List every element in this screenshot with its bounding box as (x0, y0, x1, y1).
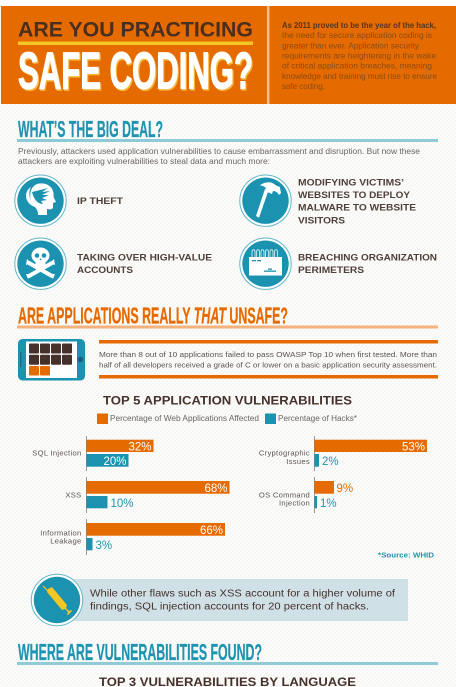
OS command injection (259, 481, 353, 510)
OS command injection: 9% (336, 483, 353, 495)
header intro text: safe coding. (282, 82, 325, 91)
label: modifying websites: VISITORS (298, 215, 346, 226)
information leakage: Information (40, 528, 82, 537)
label: taking over accounts: TAKING OVER HIGH-VALUE (77, 253, 213, 264)
callout: OWASP statistic: More than 8 out of 10 applications failed to pass OWASP Top 10 when first tested. More than (99, 350, 437, 359)
callout: SQL injection (31, 574, 408, 626)
title: are you practicing: ARE YOU PRACTICING (18, 18, 253, 42)
XSS: 10% (110, 498, 134, 510)
label: modifying websites (298, 178, 417, 226)
information leakage: 66% (200, 525, 223, 537)
label: modifying websites: WEBSITES TO DEPLOY (298, 190, 411, 201)
icon: tablet with 8 of 10 squares (18, 339, 85, 380)
section heading: what's the big deal (17, 116, 438, 142)
legend: Percentage of Hacks* (278, 414, 357, 423)
bar chart: right column (259, 436, 427, 513)
cryptographic issues (259, 440, 427, 468)
icon: firewall (240, 238, 291, 289)
icon: hammer (240, 175, 291, 226)
icon: syringe (31, 574, 83, 626)
callout: SQL injection: findings, SQL injection accounts for 20 percent of hacks. (90, 602, 369, 612)
legend (97, 414, 357, 424)
icon: head and hand, IP theft (15, 175, 66, 226)
information leakage: Leakage (50, 537, 82, 546)
OS command injection: Injection (279, 498, 310, 508)
section heading: what's the big deal: WHAT’S THE BIG DEAL? (18, 116, 163, 142)
XSS: 68% (204, 483, 228, 495)
label: taking over accounts: ACCOUNTS (77, 265, 134, 276)
header intro text: As 2011 proved to be the year of the hack, (282, 21, 436, 30)
label: taking over accounts (77, 253, 213, 276)
SQL injection: 20% (103, 456, 126, 468)
cryptographic issues: Issues (286, 457, 310, 466)
title: safe coding: SAFE CODING? (19, 44, 254, 102)
OS command injection: 1% (320, 498, 337, 510)
intro paragraph (18, 147, 421, 166)
cryptographic issues: 2% (322, 456, 339, 468)
callout: SQL injection: While other flaws such as XSS account for a higher volume of (90, 588, 395, 600)
source note: *Source: WHID (378, 550, 434, 560)
section heading: are applications really that unsafe: ARE APPLICATIONS REALLY THAT UNSAFE? (18, 302, 288, 328)
information leakage (40, 523, 225, 552)
SQL injection: 32% (128, 442, 152, 454)
header intro text: the need for secure application coding is (282, 31, 432, 40)
SQL injection (32, 440, 154, 468)
information leakage: 3% (96, 540, 112, 552)
label: breaching perimeters: PERIMETERS (298, 265, 365, 276)
header banner (1, 6, 456, 104)
intro paragraph: attackers are exploiting vulnerabilities to steal data and much more: (18, 157, 270, 166)
icon: skull and crossbones (15, 238, 66, 289)
label: breaching perimeters: BREACHING ORGANIZATION (298, 253, 437, 264)
title: safe coding (18, 42, 254, 102)
callout: OWASP statistic (99, 340, 438, 378)
label: modifying websites: MODIFYING VICTIMS’ (298, 178, 404, 189)
header intro text: requirements are heightening in the wake (282, 52, 436, 60)
cryptographic issues: Cryptographic (259, 448, 310, 458)
XSS: XSS (65, 490, 82, 500)
intro paragraph: Previously, attackers used application vulnerabilities to cause embarrassment and disruption. But now these (18, 147, 421, 156)
OS command injection: OS Command (259, 490, 310, 500)
title: safe coding: SAFE CODING? (18, 42, 253, 100)
chart title: TOP 5 APPLICATION VULNERABILITIES (103, 394, 352, 408)
legend: Percentage of Web Applications Affected (110, 414, 259, 423)
header intro text: knowledge and training must rise to ensure (282, 72, 437, 81)
label: IP theft: IP THEFT (77, 196, 123, 207)
bar chart: left column (32, 436, 230, 555)
header intro text: greater than ever. Application security (282, 41, 419, 50)
cryptographic issues: 53% (402, 442, 425, 454)
label: modifying websites: MALWARE TO WEBSITE (298, 203, 417, 214)
header intro text: of critical application breaches, meaning (282, 62, 432, 71)
SQL injection: SQL Injection (32, 448, 82, 458)
callout: OWASP statistic: half of all developers received a grade of C or lower on a basic application security assessment. (99, 360, 437, 369)
header intro text (282, 21, 437, 91)
XSS (65, 481, 230, 510)
label: breaching perimeters (298, 253, 437, 276)
